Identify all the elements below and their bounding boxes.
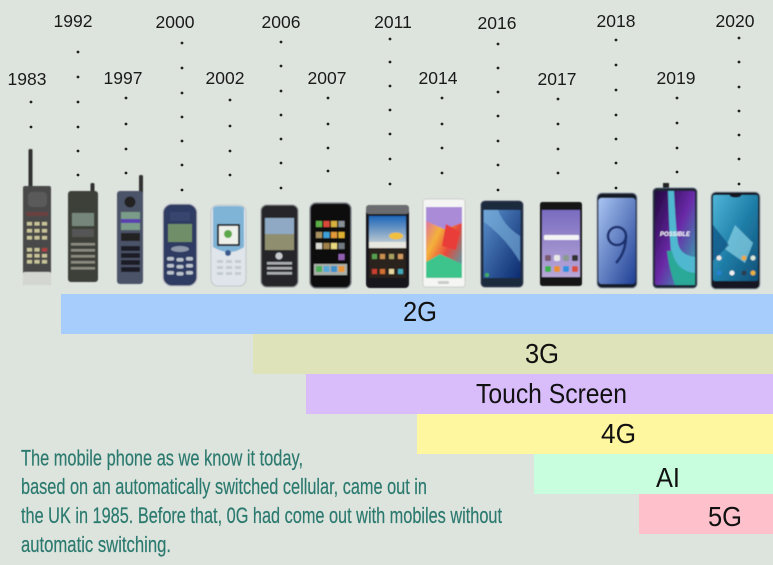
text block: description: The mobile phone as we know it today, bbox=[21, 446, 303, 470]
phone: 1997 bbox=[117, 175, 143, 284]
dotted leader lines bbox=[30, 37, 740, 191]
phone: 2019 pop-up camera bbox=[653, 183, 697, 288]
bar: 4G: 4G bbox=[601, 418, 636, 449]
phone: 2007 iPhone bbox=[310, 203, 351, 288]
year labels row: 2007 bbox=[308, 68, 346, 88]
text block: description: automatic switching. bbox=[21, 532, 171, 557]
phone: 2019 pop-up camera: POSSIBLE bbox=[660, 231, 691, 238]
phone: 2011 Galaxy S2 bbox=[366, 205, 409, 288]
year labels row: 2014 bbox=[419, 68, 458, 88]
text block: description: based on an automatically switched cellular, came out in bbox=[21, 474, 427, 499]
phone: 2016 Galaxy J7 bbox=[481, 201, 523, 287]
year labels row bbox=[8, 11, 755, 89]
bar: 4G bbox=[417, 414, 773, 454]
bar: Touch Screen: Touch Screen bbox=[476, 378, 627, 409]
bar: 3G: 3G bbox=[525, 338, 559, 369]
bar: 5G: 5G bbox=[708, 501, 742, 532]
bar: 3G bbox=[253, 334, 773, 374]
phone: 2002 Sony Ericsson bbox=[211, 205, 246, 286]
phone: 2000 Nokia 3310 bbox=[163, 204, 197, 286]
year labels row: 2017 bbox=[538, 69, 576, 89]
bar: 5G bbox=[639, 494, 773, 534]
year labels row: 2020 bbox=[716, 11, 755, 31]
bar: 2G: 2G bbox=[403, 296, 437, 327]
year labels row: 2000 bbox=[156, 12, 195, 32]
text block: description bbox=[21, 446, 502, 557]
phone: 2014 Galaxy S5 bbox=[423, 199, 465, 287]
bar: AI: AI bbox=[656, 462, 680, 493]
year labels row: 1992 bbox=[54, 11, 92, 31]
phone: 1992 bbox=[68, 183, 98, 282]
year labels row: 2002 bbox=[206, 68, 244, 88]
bar: AI bbox=[534, 454, 773, 494]
phone: 2018 Galaxy S9 bbox=[597, 193, 637, 288]
year labels row: 1997 bbox=[104, 68, 142, 88]
bar: Touch Screen bbox=[306, 374, 773, 414]
phone: 2020 Nokia 7.1 bbox=[711, 192, 760, 289]
year labels row: 2018 bbox=[597, 11, 635, 31]
year labels row: 2019 bbox=[657, 68, 695, 88]
phone: 2006 BlackBerry bbox=[261, 205, 298, 287]
bar: 2G bbox=[61, 294, 773, 334]
text block: description: the UK in 1985. Before that, 0G had come out with mobiles without bbox=[21, 503, 502, 528]
year labels row: 2016 bbox=[478, 13, 516, 33]
phone: 1983 brick bbox=[23, 149, 51, 285]
phone: 2017 Huawei bbox=[540, 202, 582, 286]
year labels row: 2006 bbox=[262, 12, 300, 32]
year labels row: 1983 bbox=[8, 69, 46, 89]
year labels row: 2011 bbox=[374, 12, 412, 32]
